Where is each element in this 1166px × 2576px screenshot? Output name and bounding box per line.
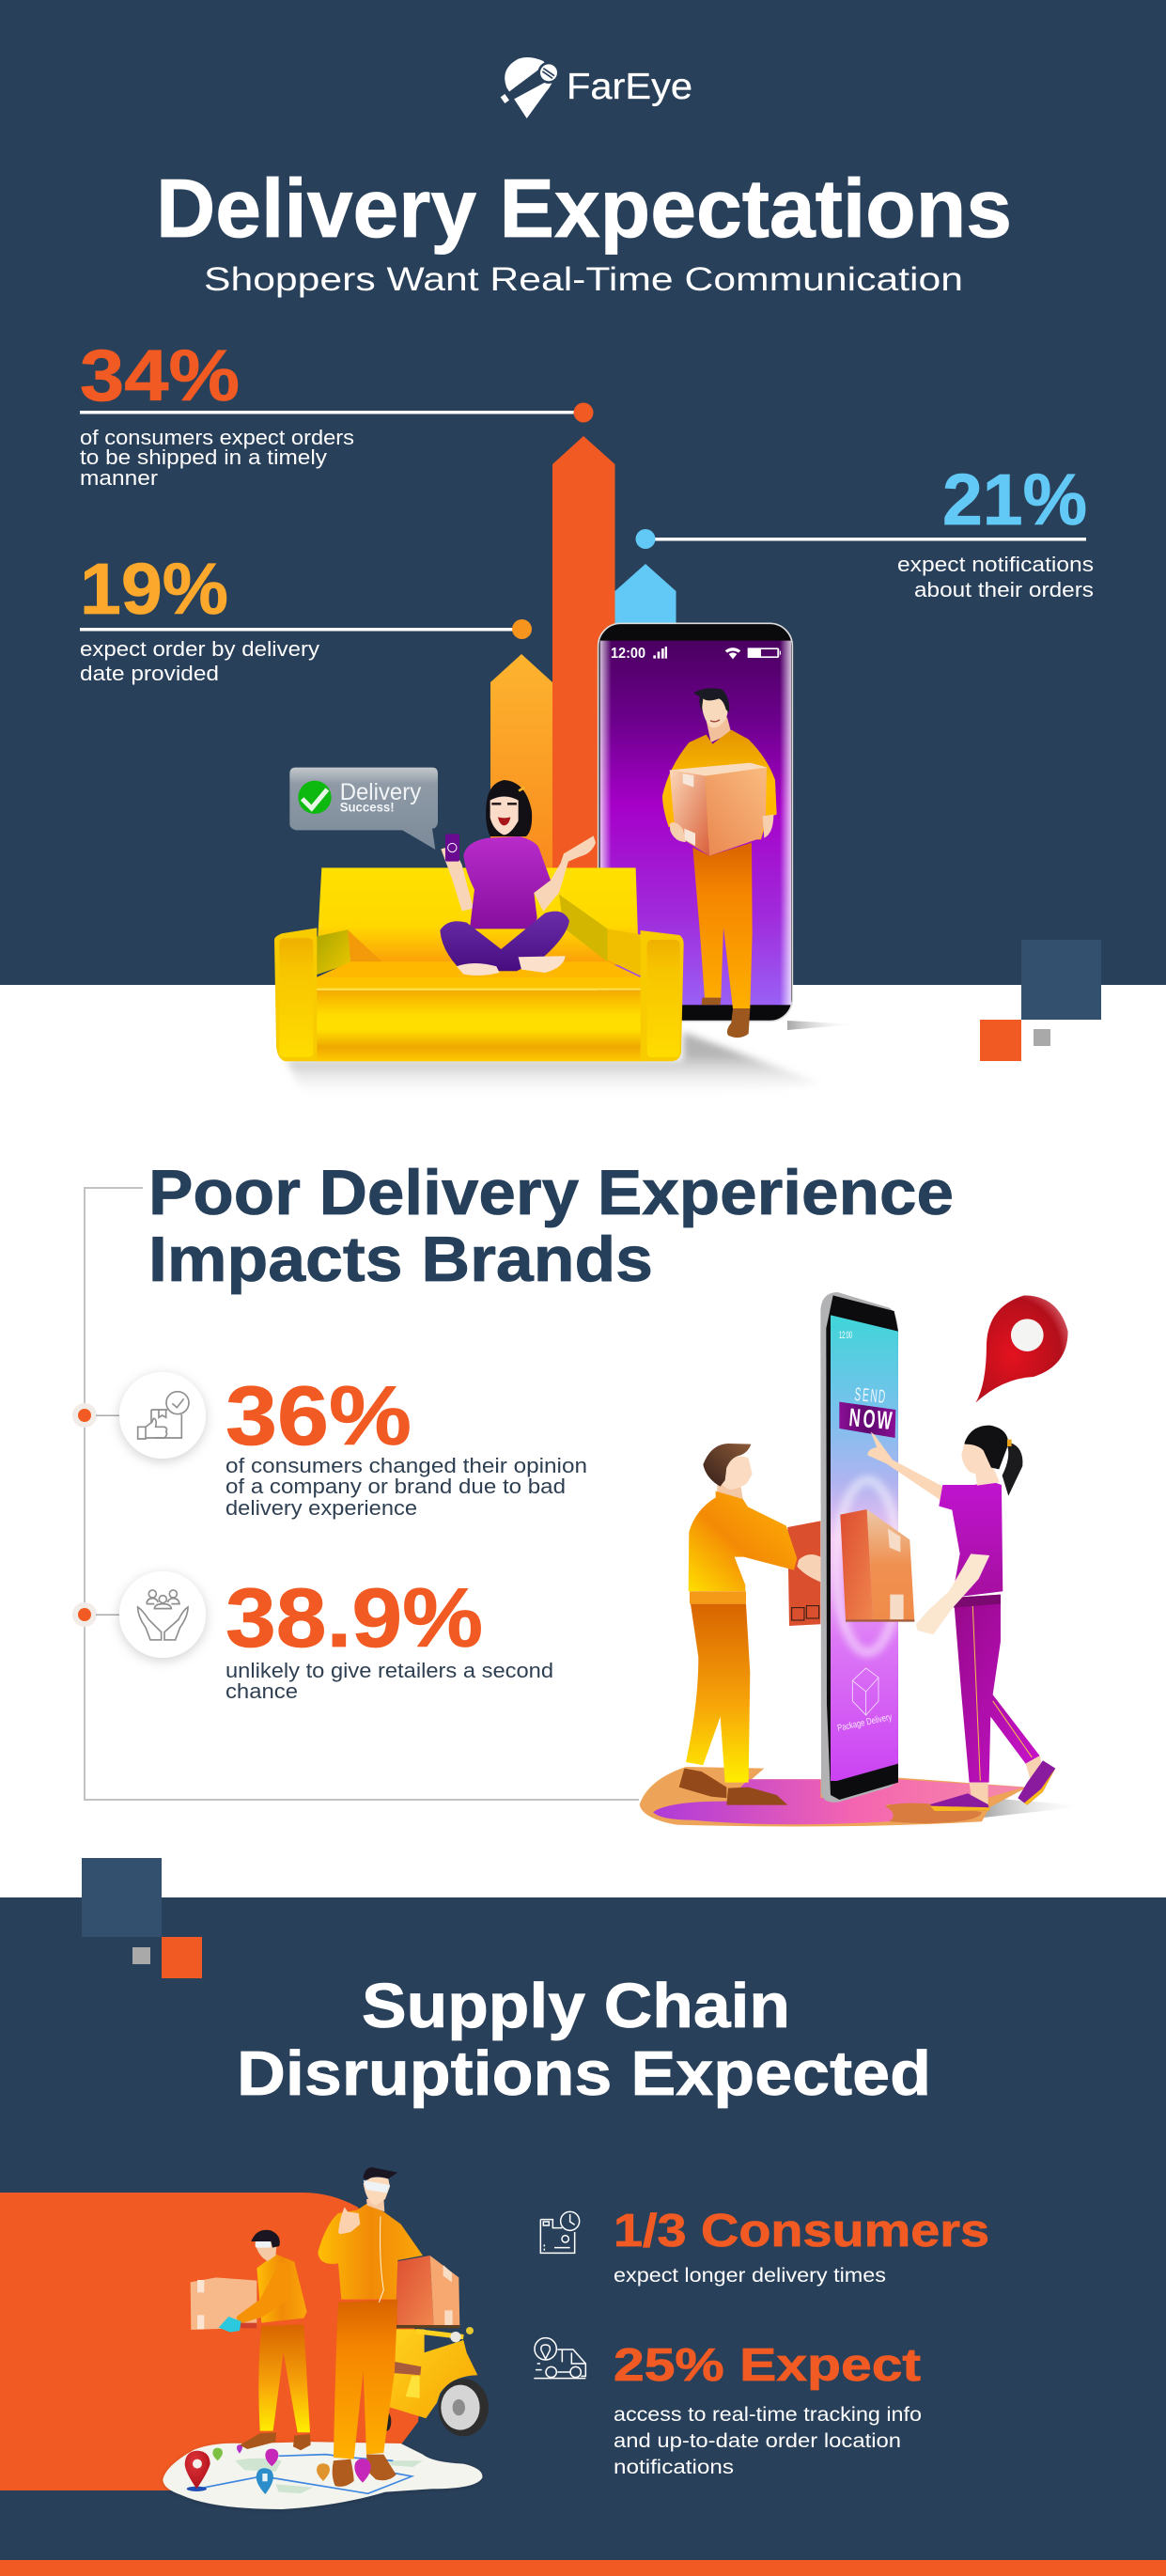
stat: 34%: to be shipped in a timely [80,445,327,469]
package on phone [840,1509,914,1622]
title: Disruptions Expected [237,2038,931,2109]
timeline dot [72,1403,119,1428]
right arm [534,835,596,912]
stat: 25% expect: access to real-time tracking info [614,2404,922,2426]
stat: 25% expect [534,2338,922,2478]
man's torso [662,730,777,839]
phone screen text: 12:00 [839,1330,852,1341]
deco squares [82,1858,202,1978]
woman [867,1426,1055,1811]
box on scooter [395,2256,459,2328]
small courier [191,2230,311,2450]
phone screen text: SEND [854,1385,886,1408]
stat: 38.9%: unlikely to give retailers a second [225,1659,553,1682]
stat: 21% [635,460,1094,601]
feet [457,956,566,976]
arrow: blue bar [614,564,676,639]
stat: 38.9%: chance [225,1679,298,1703]
illustration: woman [440,780,596,976]
stat: 1/3 consumers: 1/3 Consumers [614,2206,989,2256]
box [670,763,768,856]
man's shoes [702,998,750,1038]
stat: 38.9% [72,1570,553,1703]
illustration: sofa [274,867,684,1061]
illustration: phone and man [599,623,792,1038]
scooter [382,2327,489,2436]
tall courier [318,2167,423,2487]
stat: 36%: delivery experience [225,1496,417,1520]
delivery man [679,1444,820,1805]
stat: 21%: 21% [942,460,1087,540]
map pins [185,2444,330,2494]
stat: 19%: 19% [80,549,228,630]
connector line [85,1188,639,1800]
stat: 36%: of consumers changed their opinion [225,1454,587,1477]
stat: 34% [80,336,594,490]
phone shadow [787,1021,857,1030]
left arm [441,846,474,911]
panel: poor delivery experience [72,1157,1088,1826]
stat: 34%: manner [80,466,158,490]
magenta pin [354,2459,371,2483]
legs [440,912,569,971]
subtitle: Shoppers Want Real-Time Communication [204,261,963,298]
sofa shadow [287,1032,819,1100]
logo: FarEye: FarEye [567,67,692,107]
phone [820,1292,899,1803]
phone screen text: NOW [847,1403,894,1435]
small phone [445,834,459,862]
icon: people in hands [119,1571,206,1658]
stat: 21%: about their orders [914,578,1094,601]
location pin [975,1295,1068,1403]
phone body [599,623,792,1022]
title: Poor Delivery Experience [148,1157,954,1228]
panel: delivery expectations [0,0,1166,1100]
stat: 25% expect: 25% Expect [614,2340,921,2391]
callout: delivery success [289,768,438,850]
phone screen text [836,1330,894,1734]
phone status time: 12:00 [611,646,645,662]
stat: 1/3 consumers [540,2206,989,2287]
mouth [498,817,510,825]
stat: 25% expect: notifications [614,2457,734,2478]
illustration: couriers [163,2167,489,2509]
stat: 34%: of consumers expect orders [80,426,354,449]
stat: 38.9%: 38.9% [225,1570,483,1664]
deco squares [980,940,1101,1061]
man's smile [710,720,720,722]
orange panel [0,2193,420,2490]
icon: parcel clock [540,2211,580,2253]
phone signal [653,647,667,659]
stat: 36% [72,1368,587,1520]
stat: 36%: of a company or brand due to bad [225,1475,566,1498]
phone screen text: Package Delivery [836,1712,893,1734]
face [490,796,519,835]
man's face [702,697,727,727]
stat: 36%: 36% [225,1368,412,1462]
map [163,2442,482,2509]
icon: tracking truck [534,2338,585,2379]
hero background [0,0,1166,985]
title: Impacts Brands [148,1224,653,1295]
hair [486,780,532,836]
supply background [0,1897,1166,2576]
title [148,1157,954,1295]
arrow: orange bar [552,436,614,874]
ground puddle [640,1767,1088,1826]
footer strip [0,2560,1166,2576]
stat: 34%: 34% [80,336,240,416]
icon: package thumbs up [119,1372,206,1459]
hair clip [518,787,525,792]
callout: delivery success: Delivery [340,779,422,805]
stat: 25% expect: and up-to-date order location [614,2430,901,2452]
stat: 1/3 consumers: expect longer delivery times [614,2265,886,2287]
timeline dot [72,1602,119,1627]
title: Delivery Expectations [156,162,1012,255]
stat: 19%: date provided [80,662,219,685]
title [237,1971,931,2109]
stat: 19%: expect order by delivery [80,637,319,661]
stat: 19% [80,549,532,685]
stat: 21%: expect notifications [897,553,1094,576]
man's legs [692,843,753,1008]
panel: supply chain [0,1858,1166,2576]
phone battery [748,648,781,658]
logo: FarEye [501,57,692,118]
man's hair [693,688,729,712]
eyes [491,803,517,805]
phone wifi [725,648,740,659]
blouse [463,836,551,929]
arrow: yellow bar [490,654,552,874]
man's hands [670,815,773,842]
man's neck [707,717,731,742]
callout: delivery success: Success! [340,801,395,814]
illustration: handover at phone [640,1292,1088,1826]
title: Supply Chain [362,1971,790,2041]
phone screen [600,641,791,1005]
